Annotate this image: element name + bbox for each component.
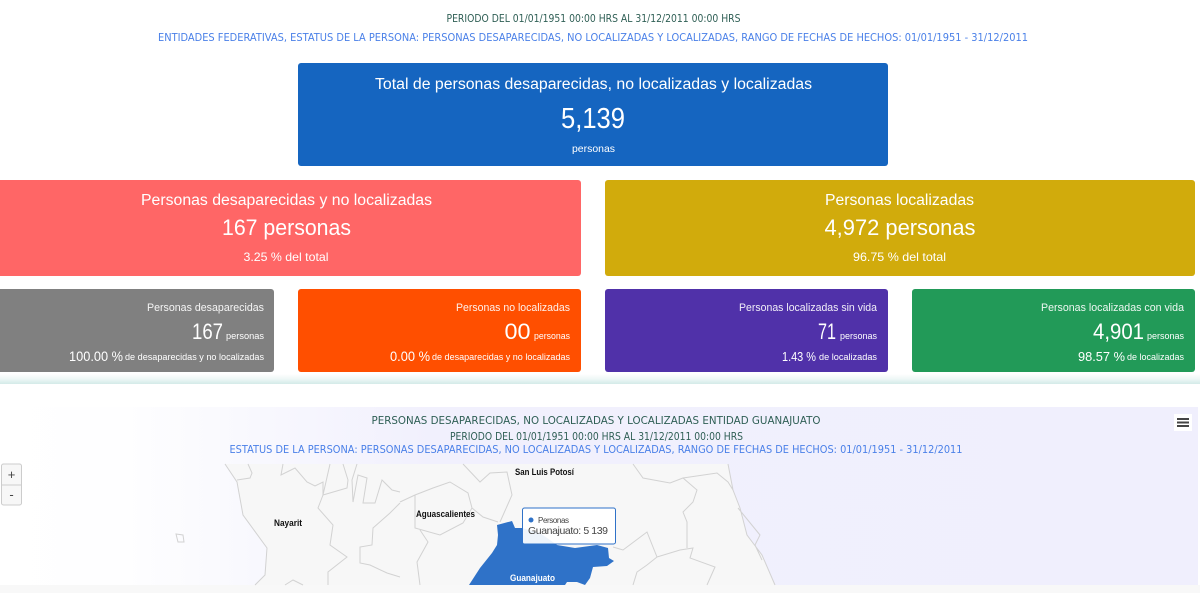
zoom controls: - (9, 487, 14, 502)
percentage caption: de localizadas (1127, 352, 1184, 363)
number: 4,972 personas (824, 215, 976, 240)
number: 71 (818, 319, 836, 344)
tooltip (522, 508, 616, 544)
unit: personas (226, 331, 264, 342)
tooltip: Guanajuato: 5 139 (528, 525, 608, 537)
percentage: 1.43 % (782, 349, 816, 364)
panel: map chart (0, 407, 1200, 593)
panel: localizadas (605, 180, 1195, 276)
number: 167 (192, 319, 223, 344)
header: filters: ENTIDADES FEDERATIVAS, ESTATUS DE LA PERSONA: PERSONAS DESAPARECIDAS, NO LOCALIZADAS Y LOCALIZADAS, RANGO DE FECHAS DE HECHOS: 01/01/1951 - 31/12/2011 (158, 31, 1028, 44)
total number: 5,139 (561, 103, 625, 135)
percentage: 0.00 % (390, 349, 430, 364)
chart period: PERIODO DEL 01/01/1951 00:00 HRS AL 31/12/2011 00:00 HRS (450, 430, 743, 443)
percentage: 98.57 % (1078, 349, 1125, 364)
map area (176, 464, 775, 585)
panel: localizadas con vida (912, 289, 1195, 372)
map label: Nayarit: Nayarit (274, 518, 302, 528)
number: 167 personas (222, 215, 351, 240)
heading: Personas desaparecidas y no localizadas (141, 192, 432, 209)
total heading: Total de personas desaparecidas, no localizadas y localizadas (375, 76, 812, 93)
panel: desaparecidas y no localizadas (0, 180, 581, 276)
unit: personas (840, 331, 877, 342)
chart subtitle: ESTATUS DE LA PERSONA: PERSONAS DESAPARECIDAS, NO LOCALIZADAS Y LOCALIZADAS, RANGO DE FECHAS DE HECHOS: 01/01/1951 - 31/12/2011 (230, 443, 962, 456)
panel: total (298, 63, 888, 166)
percentage caption: de desaparecidas y no localizadas (432, 352, 570, 363)
label: Personas localizadas con vida (1041, 302, 1185, 314)
panel: desaparecidas (0, 289, 274, 372)
label: Personas desaparecidas (147, 302, 264, 314)
percentage: 3.25 % del total (244, 250, 328, 264)
icon: chart menu (1174, 414, 1192, 431)
panel: no localizadas (298, 289, 581, 372)
total unit: personas (572, 143, 615, 155)
map label: Aguascalientes: Aguascalientes (416, 509, 475, 519)
panel: localizadas sin vida (605, 289, 888, 372)
percentage caption: de localizadas (819, 352, 877, 363)
zoom controls (2, 464, 22, 505)
map label: Guanajuato: Guanajuato (510, 573, 555, 583)
label: Personas localizadas sin vida (739, 302, 878, 314)
heading: Personas localizadas (825, 192, 974, 209)
unit: personas (534, 331, 570, 342)
percentage caption: de desaparecidas y no localizadas (125, 352, 264, 363)
label: Personas no localizadas (456, 302, 570, 314)
tooltip: Personas (538, 516, 569, 525)
zoom controls: + (8, 467, 15, 482)
number: 00 (504, 319, 530, 344)
chart title: PERSONAS DESAPARECIDAS, NO LOCALIZADAS Y LOCALIZADAS ENTIDAD GUANAJUATO (372, 414, 821, 427)
header: period: PERIODO DEL 01/01/1951 00:00 HRS AL 31/12/2011 00:00 HRS (446, 12, 741, 25)
unit: personas (1147, 331, 1184, 342)
map label: San Luis Potosi: San Luis Potosí (515, 467, 574, 477)
percentage: 96.75 % del total (853, 250, 946, 264)
state: Guanajuato (469, 521, 614, 585)
percentage: 100.00 % (69, 349, 123, 364)
number: 4,901 (1093, 319, 1144, 344)
